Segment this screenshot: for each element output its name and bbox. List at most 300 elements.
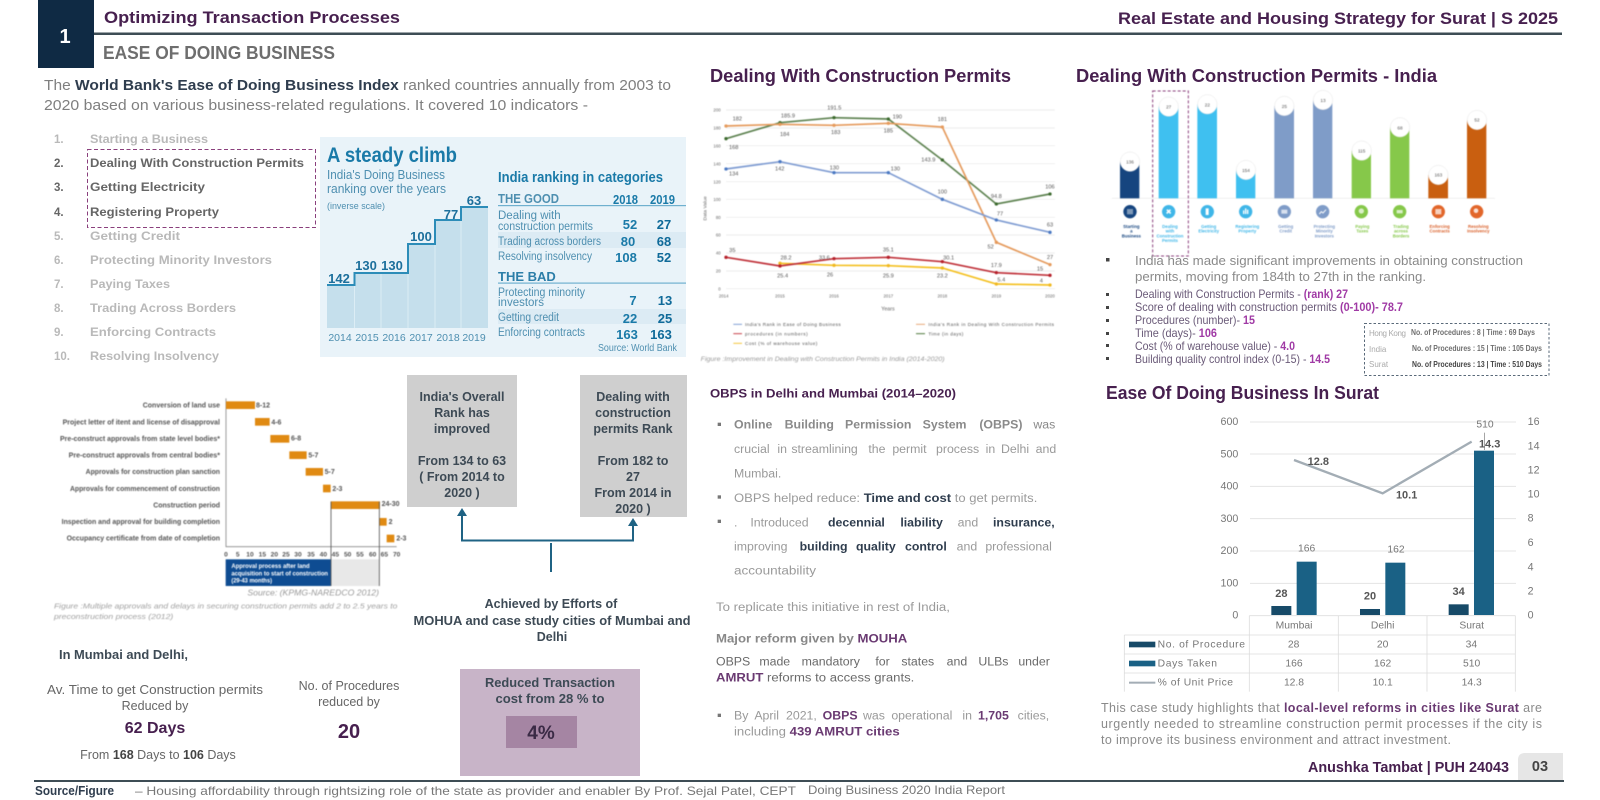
data labels: 77	[997, 212, 1003, 218]
data table: 166	[1285, 659, 1303, 670]
OBPS bullets: liability	[900, 515, 943, 529]
data labels: 30.1	[943, 255, 954, 261]
data table: 34	[1466, 640, 1477, 651]
data labels: 33.6	[819, 255, 830, 261]
reform description: under	[1018, 654, 1050, 668]
comparison box: Hong Kong, India, Surat: Surat	[1369, 360, 1389, 369]
key metrics	[1135, 287, 1403, 366]
reform description: made	[759, 654, 790, 668]
intro paragraph: 2020 based on various business-related regulations. It covered 10 indicators -	[44, 97, 588, 114]
step chart: 2015	[355, 332, 379, 344]
OBPS bullets: decennial	[828, 515, 885, 529]
OBPS bullets: and	[957, 539, 977, 553]
list item 1	[54, 134, 208, 146]
rankings table: 108	[615, 250, 637, 265]
key metrics: Building quality control index (0-15) - 14.5	[1135, 352, 1330, 366]
duration labels: 5-7	[325, 469, 335, 476]
chart legend: India's Rank in Ease of Doing Business	[745, 322, 841, 327]
right axis: 14	[1528, 440, 1540, 452]
callout: permits rank: 27	[626, 470, 640, 484]
footer	[34, 780, 1564, 798]
panel subtitle: (inverse scale)	[327, 201, 385, 211]
line chart: permits 2014-2020: 2020	[1045, 294, 1055, 299]
comparison box: Hong Kong, India, Surat: Hong Kong	[1369, 329, 1406, 338]
category labels: Insolvency	[1467, 229, 1490, 234]
line chart: permits 2014-2020: 0	[718, 286, 721, 291]
AMRUT stats: including 439 AMRUT cities	[734, 725, 900, 739]
line chart: permits 2014-2020: 180	[713, 126, 721, 131]
line chart: permits 2014-2020: 2014	[719, 294, 729, 299]
reform description	[716, 654, 1050, 685]
category labels: Electricity	[1198, 229, 1220, 234]
duration labels: 24-30	[382, 501, 400, 508]
data labels: 100	[938, 190, 947, 196]
month axis: 15	[259, 552, 266, 559]
data labels: 181	[938, 117, 947, 123]
bar chart: India rank by indicator: 136	[1126, 159, 1134, 164]
data labels: 134	[729, 172, 738, 178]
OBPS bullets: .	[734, 515, 737, 529]
replication text: To replicate this initiative in rest of India,	[716, 600, 950, 614]
data labels: 190	[893, 114, 902, 120]
category labels: Permits	[1162, 238, 1179, 243]
series: cost	[778, 262, 1052, 287]
data labels: 182	[733, 116, 742, 122]
rankings table: 7	[629, 293, 637, 308]
rankings table: 80	[621, 234, 635, 249]
data labels: 5.4	[997, 277, 1005, 283]
series: rank in dealing with construction permits	[724, 122, 1052, 266]
list item 3	[54, 182, 206, 194]
list item 9	[54, 327, 216, 339]
callout: permits rank: permits Rank	[593, 422, 673, 436]
left axis	[1221, 416, 1238, 622]
combo chart: Surat comparison: 12.8	[1308, 456, 1329, 468]
step chart: 77	[444, 207, 458, 222]
section subtitle: EASE OF DOING BUSINESS	[103, 43, 335, 63]
OBPS bullets: professional	[985, 539, 1052, 553]
stat: procedures reduced: reduced by	[318, 695, 381, 709]
data table: Surat	[1459, 621, 1484, 632]
value badges	[1120, 90, 1487, 185]
data labels: 130	[891, 166, 900, 172]
rankings table: Source: World Bank	[598, 343, 678, 354]
callout: permits rank: Dealing with	[596, 390, 670, 404]
category labels: Enforcing	[1430, 224, 1450, 229]
step chart: 2018	[436, 332, 460, 344]
OBPS bullets: Permission	[845, 418, 911, 432]
month axis: 25	[282, 552, 290, 559]
list item 9: 9.	[54, 327, 64, 339]
chart legend: Cost (% of warehouse value)	[745, 341, 818, 346]
left axis: 300	[1221, 513, 1238, 525]
AMRUT stats: in	[962, 708, 972, 722]
gantt chart: approval timeline	[53, 398, 407, 621]
reform description: AMRUT reforms to access grants.	[716, 671, 914, 685]
major reform: Major reform given by MOUHA	[716, 632, 907, 646]
line chart: permits 2014-2020: 60	[716, 233, 721, 238]
OBPS bullets: building	[800, 539, 848, 553]
OBPS bullets: Building	[785, 418, 834, 432]
OBPS bullets: in	[777, 442, 787, 456]
intro bullet: permits, moving from 184th to 27th in the ranking.	[1135, 270, 1426, 284]
duration labels: 8-12	[256, 403, 270, 410]
category labels: Starting	[1123, 224, 1140, 229]
stat: Mumbai and Delhi time: In Mumbai and Delhi,	[59, 648, 188, 662]
category labels: Paying	[1355, 224, 1370, 229]
month axis	[224, 552, 401, 559]
month axis: 0	[224, 552, 228, 559]
header rule	[94, 32, 1562, 35]
reform description: for	[875, 654, 890, 668]
figure caption	[53, 602, 398, 621]
Surat case study note: urgently needed to streamline construction permit processes if the city is	[1101, 717, 1542, 731]
line chart: permits 2014-2020: 140	[713, 161, 721, 166]
callout: overall rank: From 134 to 63	[418, 454, 506, 468]
combo chart: Surat comparison	[1124, 416, 1540, 692]
stage labels: Approvals for construction plan sanction	[86, 469, 220, 476]
category labels: Construction	[1157, 233, 1184, 238]
bar chart: India rank by indicator: 52	[1474, 118, 1480, 123]
callout: overall rank	[407, 375, 517, 507]
AMRUT stats	[734, 708, 1049, 739]
header title: Optimizing Transaction Processes	[104, 8, 400, 27]
data labels: 94.8	[991, 194, 1002, 200]
header band	[38, 0, 1562, 68]
unit price line	[1294, 442, 1472, 493]
line chart: permits 2014-2020	[701, 105, 1055, 363]
OBPS bullets	[718, 418, 1056, 717]
category labels: Dealing	[1162, 224, 1178, 229]
category labels: Business	[1122, 233, 1142, 238]
duration labels: 6-8	[291, 436, 301, 443]
chart legend: procedures (in numbers)	[745, 331, 808, 336]
data labels: 28.2	[780, 255, 792, 261]
OBPS bullets: (OBPS)	[979, 418, 1022, 432]
category labels: Getting	[1278, 224, 1294, 229]
series: rank in ease of doing business	[724, 160, 1052, 234]
data table: No. of Procedure	[1158, 640, 1245, 651]
line chart: permits 2014-2020: 80	[716, 215, 721, 220]
data labels: 184	[780, 132, 789, 138]
rankings table: investors	[498, 297, 544, 309]
rankings table: 52	[623, 217, 637, 232]
line chart: permits 2014-2020: 100	[713, 197, 721, 202]
heading: permits India: Dealing With Construction Permits - India	[1076, 66, 1438, 86]
step chart: 2017	[409, 332, 433, 344]
comparison box: Hong Kong, India, Surat: No. of Procedures : 15 | Time : 105 Days	[1412, 344, 1543, 353]
stat: Mumbai and Delhi time	[47, 648, 263, 762]
category icons	[1123, 205, 1483, 218]
page number: 03	[1532, 759, 1548, 775]
chart legend	[733, 322, 1055, 346]
arrow: efforts to results	[457, 508, 638, 572]
right axis	[1528, 416, 1540, 622]
approval callout: acquisition to start of construction	[231, 571, 328, 577]
indicator list	[54, 134, 316, 363]
comparison box: Hong Kong, India, Surat: No. of Procedures : 13 | Time : 510 Days	[1412, 360, 1543, 369]
rankings table: Dealing with	[498, 210, 561, 222]
panel: a steady climb	[320, 137, 686, 357]
Surat case study note	[1101, 701, 1542, 747]
efforts caption: Delhi	[537, 630, 567, 644]
data labels: 106	[1045, 184, 1055, 190]
list item 1: Starting a Business	[90, 134, 208, 146]
stage bars	[226, 401, 394, 542]
procedure bars	[1271, 604, 1469, 615]
month axis: 10	[246, 552, 254, 559]
list item 5: Getting Credit	[90, 231, 180, 243]
left axis: 200	[1221, 545, 1238, 557]
bar and line labels: 510	[1476, 420, 1494, 431]
AMRUT stats: By	[734, 708, 749, 722]
panel subtitle: ranking over the years	[327, 181, 446, 196]
panel subtitle: India's Doing Business	[327, 167, 445, 182]
category labels: Resolving	[1468, 224, 1489, 229]
month axis: 45	[332, 552, 339, 559]
OBPS bullets: the	[868, 442, 886, 456]
category labels: across	[1394, 229, 1409, 234]
month axis: 5	[236, 552, 240, 559]
data labels: 23.2	[937, 273, 948, 279]
stage labels: Construction period	[153, 502, 220, 509]
right axis: 6	[1528, 537, 1534, 549]
rankings table: India ranking in categories	[498, 169, 663, 186]
section number badge: 1	[59, 26, 71, 48]
month axis: 60	[369, 552, 377, 559]
second source: Doing Business 2020 India Report	[808, 783, 1006, 797]
figure caption: Figure :Improvement in Dealing with Construction Permits in India (2014-2020)	[701, 356, 945, 363]
series: procedures	[724, 256, 1052, 277]
key metrics: Procedures (number)- 15	[1135, 313, 1255, 327]
category labels: Getting	[1201, 224, 1217, 229]
data labels	[729, 105, 1055, 284]
data table: 14.3	[1462, 678, 1482, 689]
step chart: 2014	[328, 332, 352, 344]
list item 5	[54, 231, 180, 243]
OBPS bullets: improving	[734, 539, 788, 553]
data labels: 17.9	[991, 263, 1002, 269]
Surat case study note: This case study highlights that local-level reforms in cities like Surat are	[1101, 701, 1542, 715]
data labels: 26	[827, 273, 833, 279]
comparison box: Hong Kong, India, Surat: India	[1369, 345, 1387, 354]
combo chart: Surat comparison: 14.3	[1479, 439, 1500, 451]
data labels: 185.9	[781, 113, 795, 119]
callout: permits rank: From 182 to	[598, 454, 669, 468]
list item 8: Trading Across Borders	[90, 303, 236, 315]
left axis: 600	[1221, 416, 1238, 428]
stage labels: Approvals for commencement of construction	[70, 486, 220, 493]
bullet markers	[1106, 258, 1110, 360]
days bars	[1297, 451, 1494, 615]
AMRUT stats: cities,	[1018, 708, 1049, 722]
right axis: 16	[1528, 416, 1540, 428]
OBPS heading: OBPS in Delhi and Mumbai (2014–2020)	[710, 387, 956, 401]
list item 1: 1.	[54, 134, 64, 146]
stage labels: Conversion of land use	[143, 403, 220, 410]
source note: Source: (KPMG-NAREDCO 2012)	[247, 589, 379, 598]
category labels: Minority	[1316, 229, 1333, 234]
callout: permits rank: 2020 )	[615, 502, 651, 516]
category labels: Investors	[1315, 233, 1335, 238]
callout: permits rank: construction	[595, 406, 671, 420]
category labels: a	[1130, 229, 1133, 234]
month axis: 50	[344, 552, 352, 559]
category labels: with	[1165, 229, 1175, 234]
key metrics: Score of dealing with construction permits (0-100)- 78.7	[1135, 300, 1403, 314]
data table: 162	[1374, 659, 1392, 670]
bars	[1120, 100, 1486, 198]
report title: Real Estate and Housing Strategy for Surat | S 2025	[1118, 9, 1558, 28]
bar and line labels	[1298, 420, 1494, 556]
AMRUT stats: OBPS	[823, 708, 858, 722]
duration labels: 5-7	[308, 452, 319, 459]
intro bullet	[1135, 254, 1523, 284]
list item 4	[54, 207, 220, 219]
list item 6: Protecting Minority Investors	[90, 255, 272, 267]
bar chart: India rank by indicator: 22	[1205, 102, 1210, 107]
list item 9: Enforcing Contracts	[90, 327, 216, 339]
right axis: 4	[1528, 561, 1534, 573]
month axis: 40	[320, 552, 327, 559]
month axis: 30	[294, 552, 302, 559]
comparison box: Hong Kong, India, Surat: No. of Procedures : 8 | Time : 69 Days	[1411, 328, 1536, 337]
page number	[1518, 753, 1563, 781]
callout: permits rank: From 2014 in	[594, 486, 672, 500]
stat: transaction cost: cost from 28 % to	[496, 692, 605, 706]
AMRUT stats: operational	[891, 708, 952, 722]
author and page number	[1308, 753, 1563, 781]
key metrics: Time (days)- 106	[1135, 326, 1217, 340]
data labels: 191.5	[827, 105, 841, 111]
data table: Days Taken	[1158, 659, 1217, 670]
intro bullet: India has made significant improvements in obtaining construction	[1135, 254, 1523, 268]
list item 2: 2.	[54, 158, 64, 170]
line chart: permits 2014-2020: Years	[881, 307, 895, 313]
data labels: 35.1	[883, 247, 894, 253]
data labels: 35	[729, 248, 735, 254]
stat: procedures reduced: No. of Procedures	[299, 679, 399, 693]
chart legend: Time (in days)	[928, 331, 964, 336]
OBPS bullets: OBPS helped reduce: Time and cost to get permits.	[734, 491, 1037, 505]
key metrics: Cost (% of warehouse value) - 4.0	[1135, 339, 1295, 353]
callout: overall rank: Rank has	[434, 406, 490, 420]
OBPS bullets: process	[936, 442, 979, 456]
source citation: – Housing affordability through rightsizing role of the state as provider and enabler By Prof. Sejal Patel, CEPT	[135, 784, 797, 798]
left axis: 0	[1232, 610, 1238, 622]
list item 3: Getting Electricity	[90, 182, 206, 194]
rankings table: 163	[616, 327, 638, 342]
list item 4: Registering Property	[90, 207, 220, 219]
step chart: 130	[381, 258, 403, 273]
step chart	[327, 193, 488, 344]
stat: transaction cost: 4%	[527, 723, 555, 744]
callout: overall rank: improved	[434, 422, 490, 436]
line chart: permits 2014-2020: 2018	[938, 294, 948, 299]
bar chart: India rank by indicator: 25	[1282, 104, 1287, 109]
AMRUT stats: April	[754, 708, 779, 722]
right axis: 0	[1528, 610, 1534, 622]
list item 10: 10.	[54, 351, 70, 363]
duration labels	[256, 403, 407, 543]
stat: Mumbai and Delhi time: From 168 Days to 106 Days	[80, 748, 236, 762]
rankings table: 22	[623, 311, 637, 326]
figure caption: preconstruction process (2012)	[53, 612, 174, 621]
OBPS bullets: Delhi	[1001, 442, 1029, 456]
OBPS bullets: in	[986, 442, 995, 456]
step chart: 2016	[382, 332, 406, 344]
data labels: 63	[1047, 223, 1053, 229]
left axis: 500	[1221, 448, 1238, 460]
left axis: 100	[1221, 577, 1238, 589]
reform description: mandatory	[802, 654, 861, 668]
panel subtitle	[327, 167, 446, 211]
stat: Mumbai and Delhi time: Reduced by	[122, 699, 189, 713]
data labels: 15	[1037, 267, 1043, 273]
left axis: 400	[1221, 481, 1238, 493]
OBPS bullets: streamlining	[791, 442, 858, 456]
stage labels: Occupancy certificate from date of completion	[67, 536, 220, 543]
reform description: ULBs	[978, 654, 1008, 668]
line chart: permits 2014-2020: 2017	[884, 294, 894, 299]
right axis: 12	[1528, 464, 1540, 476]
category labels	[1122, 224, 1490, 243]
duration labels: 4-6	[271, 419, 282, 426]
intro paragraph	[44, 77, 671, 114]
rankings table	[498, 169, 686, 354]
month axis: 20	[271, 552, 278, 559]
category labels: Property	[1238, 229, 1257, 234]
list item 10: Resolving Insolvency	[90, 351, 220, 363]
stage labels: Pre-construct approvals from central bodies*	[69, 452, 220, 459]
line chart: permits 2014-2020: 2019	[992, 294, 1002, 299]
OBPS bullets: was	[1032, 418, 1055, 432]
OBPS bullets: control	[905, 539, 947, 553]
series: time in days	[724, 116, 1052, 206]
OBPS bullets: accountability	[734, 564, 817, 578]
line chart: permits 2014-2020: Data Value	[703, 196, 709, 220]
stat: transaction cost: Reduced Transaction	[485, 676, 615, 690]
duration labels: 2-3	[332, 486, 343, 493]
bar chart: India rank by indicator: 154	[1242, 168, 1250, 173]
line chart: permits 2014-2020: 40	[716, 251, 721, 256]
combo chart: Surat comparison: 20	[1364, 590, 1376, 602]
bar chart: India rank by indicator: 13	[1320, 98, 1326, 103]
Surat case study note: to improve its business environment and attract investment.	[1101, 733, 1451, 747]
step chart: 100	[410, 229, 432, 244]
bar and line labels: 166	[1298, 544, 1316, 555]
rankings table: 13	[658, 293, 672, 308]
data table: 10.1	[1373, 678, 1393, 689]
OBPS bullets: Online	[734, 418, 773, 432]
rankings table: Enforcing contracts	[498, 327, 585, 339]
category labels: Borders	[1393, 233, 1410, 238]
OBPS bullets: Mumbai.	[734, 466, 781, 480]
list item 6: 6.	[54, 255, 64, 267]
combo chart: Surat comparison: 34	[1453, 586, 1466, 598]
AMRUT stats: 1,705	[978, 708, 1009, 722]
step chart: 63	[467, 193, 481, 208]
list item 7: Paying Taxes	[90, 279, 170, 291]
rankings table: 2018	[613, 193, 638, 207]
key metrics: Dealing with Construction Permits - (rank) 27	[1135, 287, 1348, 301]
data table: Delhi	[1371, 621, 1394, 632]
right axis: 8	[1528, 513, 1534, 525]
step chart: 130	[355, 258, 377, 273]
heading: dealing with construction permits: Dealing With Construction Permits	[710, 66, 1011, 86]
month axis: 65	[381, 552, 388, 559]
right axis: 10	[1528, 489, 1540, 501]
